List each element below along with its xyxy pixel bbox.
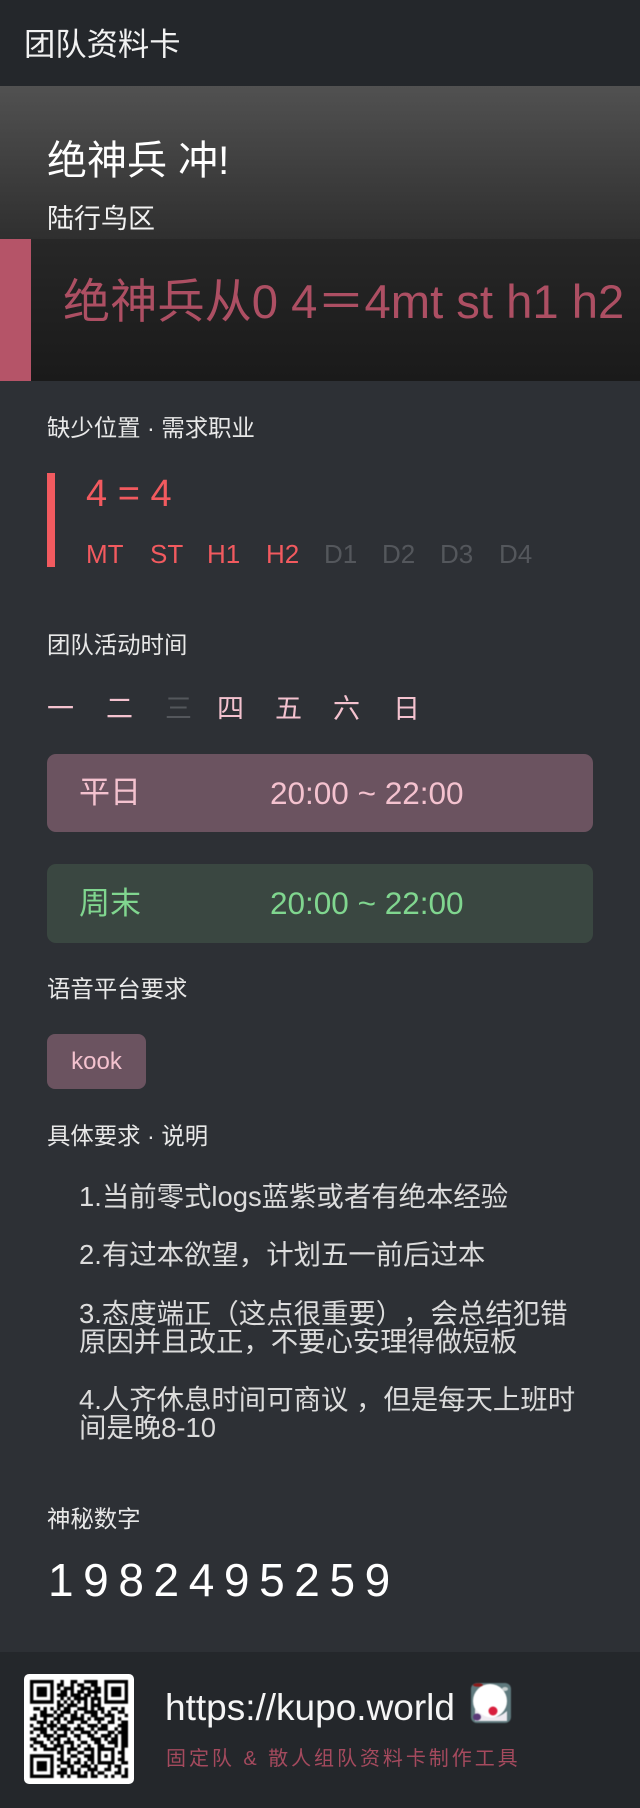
text: requirement 4: 4.人齐休息时间可商议 ，但是每天上班时 (79, 1384, 575, 1415)
text: number: 1982495259 (48, 1554, 400, 1606)
text: requirement 3 (79, 1298, 568, 1357)
text: requirement 2: 2.有过本欲望，计划五一前后过本 (79, 1239, 485, 1270)
weekday list: 二 (106, 694, 133, 724)
text: requirement 4 (79, 1384, 575, 1443)
role list (86, 539, 532, 569)
text: requirement 3: 原因并且改正，不要心安理得做短板 (79, 1326, 517, 1357)
panel: recruitment banner (0, 239, 640, 381)
heading: missing roles: 缺少位置 · 需求职业 (47, 415, 255, 441)
role list: MT (86, 539, 124, 569)
card: weekday hours (47, 754, 593, 832)
text: tagline: 固定队 & 散人组队资料卡制作工具 (166, 1748, 521, 1770)
tag: kook (47, 1034, 146, 1089)
tag: kook: kook (71, 1048, 122, 1075)
weekday list (47, 694, 420, 724)
heading: activity time: 团队活动时间 (47, 632, 187, 658)
text: site URL: https://kupo.world (165, 1687, 455, 1728)
weekday list: 一 (47, 694, 74, 724)
role list: D1 (324, 539, 357, 569)
role list: D4 (499, 539, 532, 569)
role list: D2 (382, 539, 415, 569)
accent bar (47, 473, 55, 567)
panel: missing roles (47, 415, 532, 569)
header bar (0, 0, 640, 86)
heading: requirements: 具体要求 · 说明 (47, 1123, 208, 1149)
card: weekend hours (47, 864, 593, 943)
text: requirement 4: 间是晚8-10 (79, 1412, 216, 1443)
text: weekday time: 20:00 ~ 22:00 (270, 775, 464, 811)
text: server: 陆行鸟区 (47, 204, 155, 234)
heading: voice platform: 语音平台要求 (47, 976, 187, 1002)
panel: voice platform (47, 976, 187, 1089)
footer (0, 1652, 640, 1808)
role list: H2 (266, 539, 299, 569)
panel: secret number (47, 1506, 400, 1606)
text: banner slogan: 绝神兵从0 4＝4mt st h1 h2 (63, 276, 624, 329)
weekday list: 六 (333, 694, 360, 724)
text: requirement 1: 1.当前零式logs蓝紫或者有绝本经验 (79, 1181, 508, 1212)
icon: moogle (470, 1682, 512, 1724)
text: weekend time: 20:00 ~ 22:00 (270, 885, 464, 921)
weekday list: 日 (393, 694, 420, 724)
role list: ST (150, 539, 183, 569)
heading: team name: 绝神兵 冲! (47, 139, 229, 183)
panel: requirements (47, 1123, 575, 1443)
text: requirement 3: 3.态度端正（这点很重要），会总结犯错 (79, 1298, 568, 1329)
text: team count: 4 = 4 (86, 473, 172, 515)
label: weekend: 周末 (79, 886, 141, 921)
role list: D3 (440, 539, 473, 569)
heading: page title: 团队资料卡 (24, 27, 180, 62)
role list: H1 (207, 539, 240, 569)
panel: activity time (47, 632, 593, 943)
weekday list: 五 (275, 694, 302, 724)
weekday list: 四 (217, 694, 244, 724)
QR code (24, 1674, 134, 1784)
accent bar (0, 239, 31, 381)
weekday list: 三 (165, 694, 192, 724)
label: weekday: 平日 (79, 775, 141, 810)
panel: hero (0, 86, 640, 239)
heading: secret number: 神秘数字 (47, 1506, 141, 1532)
